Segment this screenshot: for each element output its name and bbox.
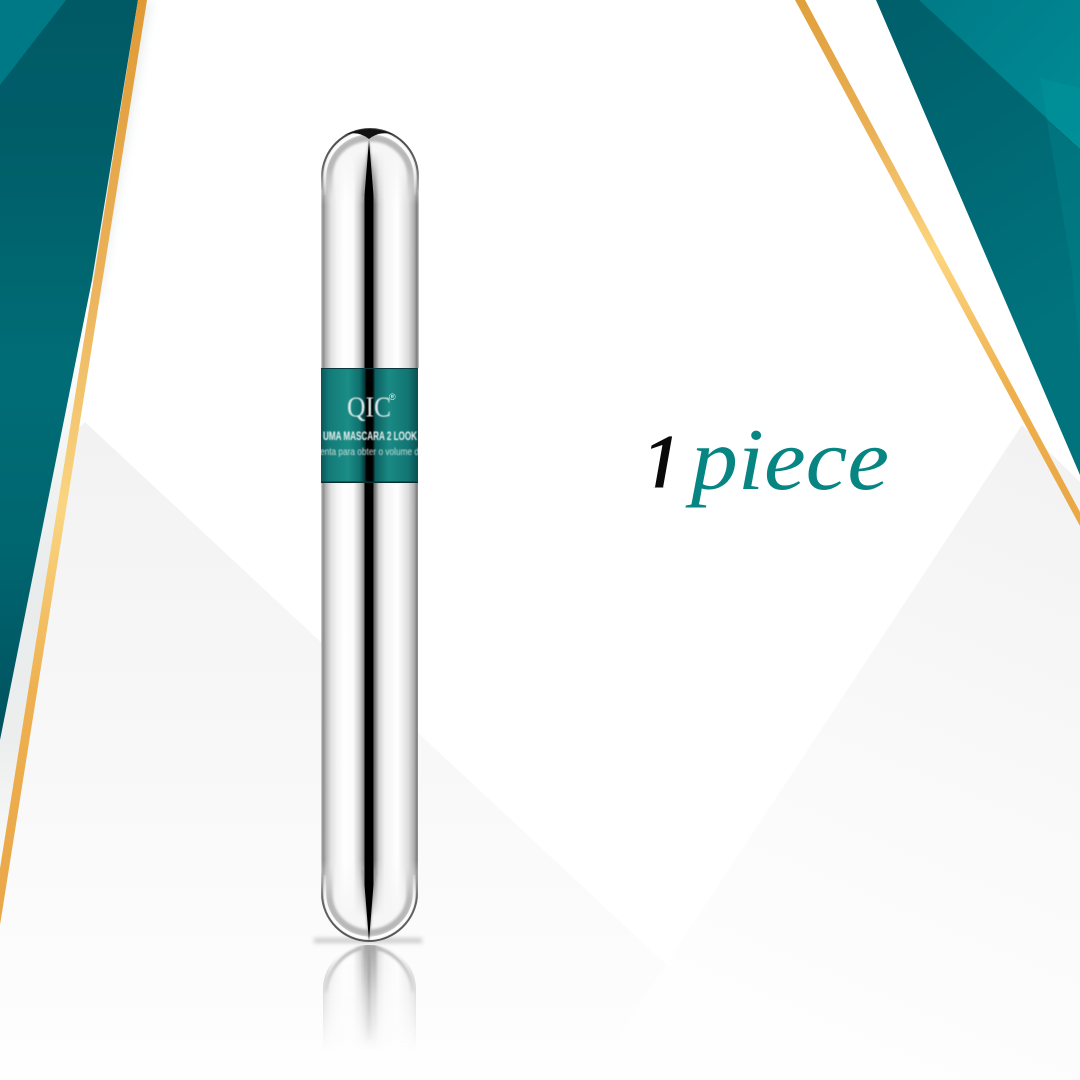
teal label band — [320, 367, 419, 484]
caption: 1 piece — [650, 430, 887, 508]
left corner decoration — [0, 0, 152, 925]
word: piece — [685, 412, 889, 509]
tube lower body — [321, 483, 418, 942]
label headline: UMA MASCARA 2 LOOK — [323, 431, 417, 443]
teal light triangle — [0, 0, 66, 85]
mascara tube — [320, 128, 419, 942]
gold line: right — [795, 0, 1080, 526]
gold line: left — [0, 0, 147, 925]
tube base shadow — [314, 938, 422, 943]
tube upper cap — [321, 128, 419, 368]
teal facet: right — [876, 0, 1080, 475]
teal facet: left — [0, 0, 138, 740]
numeral: 1 — [641, 418, 682, 509]
background: right grey triangle — [590, 425, 1080, 1080]
brand logo: QIC — [347, 392, 391, 424]
registered mark: ® — [389, 392, 396, 402]
right corner decoration — [795, 0, 1080, 526]
label subline: enta para obter o volume d — [320, 447, 419, 458]
teal light facet — [919, 0, 1080, 149]
background: left grey triangle — [0, 422, 790, 1080]
mascara tube reflection — [323, 945, 416, 1040]
